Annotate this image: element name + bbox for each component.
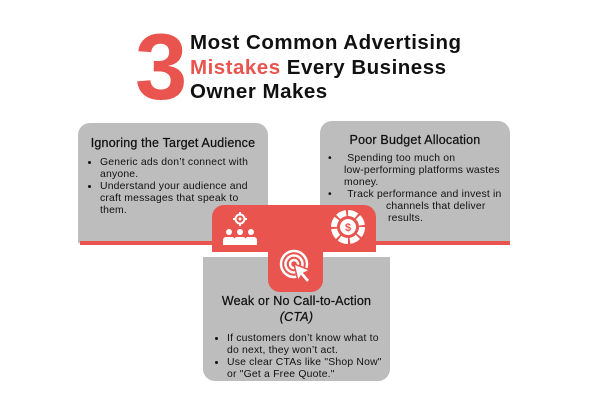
panel: weak CTA <box>203 257 390 381</box>
panel: poor budget allocation <box>320 121 510 243</box>
text block: Generic ads don’t connect with anyone. <box>100 157 248 180</box>
text block: • Track performance and invest in <box>328 189 502 200</box>
big number 3: 3 <box>135 14 185 119</box>
text block <box>328 153 502 224</box>
panel: ignoring target audience <box>78 123 268 243</box>
text block <box>215 333 382 380</box>
icon: budget chart: $ <box>345 222 351 234</box>
title text: Most Common Advertising <box>190 31 462 54</box>
icon: budget chart <box>331 210 365 244</box>
icon: click pointer <box>280 250 309 282</box>
text block: Use clear CTAs like "Shop Now" or "Get a Free Quote." <box>227 357 382 380</box>
title <box>135 14 462 119</box>
text block: If customers don’t know what to do next, they won’t act. <box>227 333 379 356</box>
heading <box>222 294 371 324</box>
text block: low-performing platforms wastes <box>344 165 500 176</box>
title text: Mistakes Every Business <box>190 56 447 78</box>
red divider line <box>80 241 510 245</box>
title text: Owner Makes <box>190 80 328 103</box>
heading: Poor Budget Allocation <box>350 133 480 147</box>
text block: • Spending too much on <box>328 153 455 164</box>
red center box with icons <box>212 205 376 255</box>
heading: Weak or No Call-to-Action <box>222 294 371 308</box>
heading: Ignoring the Target Audience <box>91 136 255 150</box>
text block: money. <box>344 177 379 188</box>
red tab with click icon <box>268 250 323 292</box>
text block: results. <box>388 213 423 224</box>
heading: (CTA) <box>280 310 313 324</box>
text block <box>88 157 248 216</box>
text block: channels that deliver <box>386 201 486 212</box>
icon: target audience <box>223 212 257 245</box>
title text <box>190 31 462 103</box>
white stripe <box>212 252 376 255</box>
text block: Understand your audience and craft messages that speak to them. <box>100 181 248 216</box>
